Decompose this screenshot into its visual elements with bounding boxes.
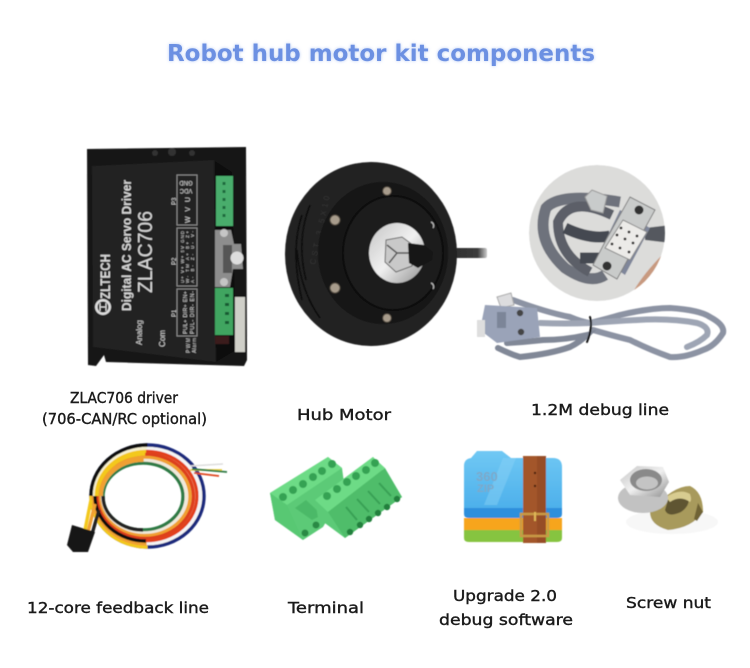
label: Hub Motor: Hub Motor <box>297 406 392 424</box>
driver printed labels: GND <box>179 179 193 185</box>
axle nut <box>385 237 413 272</box>
driver printed labels: ZLTECH <box>97 254 113 299</box>
label: ZLAC706 driver: ZLAC706 driver <box>70 389 179 407</box>
connector: lower green terminal <box>215 288 233 344</box>
cable gland <box>408 243 433 268</box>
silver hub centre <box>369 223 425 283</box>
panel: debug cable photos <box>477 165 723 357</box>
driver pin boxes <box>177 175 197 336</box>
icon: screw nut and washer <box>618 466 718 534</box>
driver printed labels: Digital AC Servo Driver <box>120 180 134 311</box>
driver printed labels: A- B- Z- U- V- <box>190 230 195 283</box>
terminal block front <box>315 457 402 538</box>
label: 12-core feedback line: 12-core feedback line <box>27 599 209 617</box>
spring washer <box>650 486 703 530</box>
driver printed labels <box>97 179 198 353</box>
driver printed labels: Alarm <box>192 338 198 353</box>
hub cover <box>343 196 443 310</box>
circular detail photo <box>529 165 670 301</box>
DB9 connector <box>593 197 655 279</box>
driver printed labels: W V U <box>185 197 192 223</box>
coiled grey ribbon cable <box>498 300 723 357</box>
connector: D-sub port <box>215 229 244 287</box>
label: Screw nut: Screw nut <box>626 594 711 612</box>
label: ZLAC706 driver <box>42 389 207 428</box>
panel: hub motor photo <box>285 162 487 346</box>
label: ZLAC706 driver: (706-CAN/RC optional) <box>42 410 207 428</box>
driver printed labels: PWM <box>186 338 192 353</box>
tyre <box>285 162 457 346</box>
hex flange nut <box>618 466 669 513</box>
motor side plate <box>318 182 448 324</box>
RJ45 plug <box>497 293 514 308</box>
panel: ZLAC706 driver photo <box>87 147 247 366</box>
label: Upgrade 2.0 debug software: debug software <box>439 611 573 629</box>
driver printed labels: Analog <box>135 320 144 345</box>
bolts <box>330 187 391 322</box>
connector: wire plug <box>67 525 95 552</box>
panel: green terminal blocks <box>270 457 402 540</box>
spec sticker <box>235 297 245 352</box>
driver printed labels: P2 <box>172 257 178 265</box>
title: Robot hub motor kit components <box>167 39 595 67</box>
title: Robot hub motor kit components <box>167 39 595 67</box>
driver printed labels: W- TM A+ B+ Z+ <box>185 231 190 283</box>
driver printed labels: PUL- DIR- EN- <box>190 291 196 334</box>
panel: 12-core feedback line <box>67 445 227 552</box>
label: 1.2M debug line: 1.2M debug line <box>531 401 669 419</box>
label: Terminal: Terminal <box>287 599 364 617</box>
label: Upgrade 2.0 debug software <box>439 587 573 629</box>
driver printed labels: Com <box>158 330 167 347</box>
connector: upper green terminal <box>216 176 233 226</box>
driver printed labels: VDC <box>179 187 192 193</box>
archive label: ZIP <box>477 483 494 495</box>
cable <box>425 248 487 258</box>
label: Upgrade 2.0 debug software: Upgrade 2.0 <box>453 587 557 605</box>
icon: 360 zip archive software <box>464 451 562 543</box>
driver printed labels: P3 <box>172 197 178 205</box>
icon: ZLTECH logo <box>95 299 111 315</box>
driver printed labels: U+ V+ W+ 5V GND <box>180 230 185 283</box>
DB9 plug <box>480 305 540 343</box>
driver printed labels: PUL+ DIR+ EN+ <box>183 291 189 334</box>
driver printed labels: P1 <box>172 309 178 317</box>
buckle <box>521 514 548 536</box>
driver printed labels: ZLAC706 <box>135 211 157 293</box>
leather strap <box>523 456 546 543</box>
archive label <box>476 469 498 495</box>
archive label: 360 <box>476 469 498 484</box>
terminal block rear <box>270 457 345 540</box>
panel: hub motor photo: CST 3.5X10 <box>308 195 332 265</box>
